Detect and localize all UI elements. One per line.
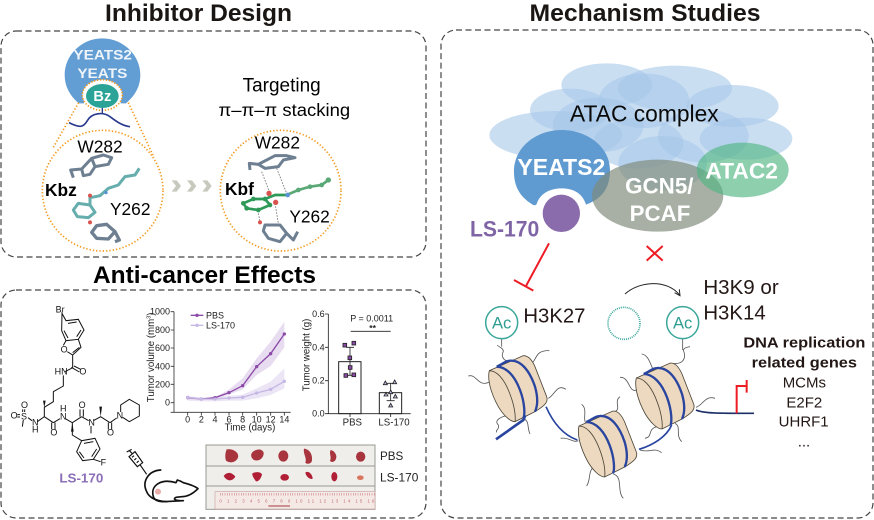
labels: photo rows xyxy=(380,450,419,485)
labels: photo rows: PBS xyxy=(380,450,404,463)
chemical structure: LS-170: O xyxy=(11,411,18,421)
bar chart: tumor weight: 0.0 xyxy=(312,409,325,419)
chemical structure: LS-170: H xyxy=(32,425,38,435)
panel: mechanism studies xyxy=(441,30,873,518)
text: targeting stacking: Targeting xyxy=(243,76,321,97)
mechanism bottom xyxy=(468,277,865,498)
chemical structure: LS-170: HN xyxy=(55,367,68,377)
text: DNA replication genes: MCMs xyxy=(783,374,826,391)
icon: syringe xyxy=(127,449,147,474)
circle: Kbz binding pocket: Y262 xyxy=(110,199,150,219)
chemical structure: LS-170: O xyxy=(61,344,68,354)
protein: YEATS2 xyxy=(514,130,610,205)
line chart: tumor volume: Time (days) xyxy=(225,422,275,433)
line chart: tumor volume: 14 xyxy=(279,414,289,424)
chemical structure: LS-170: O xyxy=(79,400,86,410)
panel: inhibitor design xyxy=(1,31,426,257)
chemical structure: LS-170: S xyxy=(21,411,27,421)
line chart: tumor volume: 800 xyxy=(155,325,170,335)
label: LS-170: LS-170 xyxy=(59,471,103,486)
line chart: tumor volume: 400 xyxy=(155,361,170,371)
promoter xyxy=(737,380,747,413)
mouse, syringe and tumor photo xyxy=(127,445,375,509)
chemical structure: LS-170: F xyxy=(101,457,107,467)
bar chart: tumor weight xyxy=(301,309,411,429)
inhibition arrow xyxy=(514,243,549,291)
nucleosome 3 xyxy=(636,363,694,429)
text: targeting stacking: π–π–π stacking xyxy=(218,100,350,120)
line chart: tumor volume: 8 xyxy=(240,414,245,424)
line chart: tumor volume: LS-170 xyxy=(206,320,235,330)
icon: mouse xyxy=(145,470,198,502)
circle: Kbz binding pocket: W282 xyxy=(77,137,123,157)
line chart: tumor volume: 600 xyxy=(155,343,170,353)
acetyl mark H3K27: Ac xyxy=(492,313,511,332)
empty acetyl site xyxy=(608,307,640,339)
protein: ATAC2 xyxy=(697,143,789,197)
inhibitor: LS-170: LS-170 xyxy=(470,217,539,242)
mechanism top xyxy=(470,63,792,291)
title: Inhibitor Design: Inhibitor Design xyxy=(105,0,292,27)
chemical structure: LS-170: N xyxy=(117,411,123,421)
bar chart: tumor weight: Tumor weight (g) xyxy=(301,319,312,391)
YEATS2 domain with Bz ligand: Bz xyxy=(93,89,111,105)
label: H3K9 or H3K14: H3K14 xyxy=(703,302,766,324)
bar chart: tumor weight: 0.6 xyxy=(312,309,325,319)
inhibitor: LS-170 xyxy=(470,195,580,242)
line chart: tumor volume: Tumor volume (mm xyxy=(146,319,157,402)
line chart: tumor volume: 1000 xyxy=(150,307,170,317)
line chart: tumor volume: 10 xyxy=(252,414,262,424)
nucleosome 1 xyxy=(489,356,547,422)
panel: anti-cancer effects xyxy=(1,290,426,518)
DNA linker strands xyxy=(496,407,754,449)
text: DNA replication genes: related genes xyxy=(752,355,857,371)
line chart: tumor volume: 6 xyxy=(226,414,231,424)
chemical structure: LS-170: Br xyxy=(56,305,65,315)
line chart: tumor volume: 0 xyxy=(185,414,190,424)
anti-cancer contents xyxy=(59,307,419,486)
YEATS2 domain with Bz ligand xyxy=(65,38,140,127)
label: H3K9 or H3K14 xyxy=(703,277,779,324)
bar chart: tumor weight: 0.4 xyxy=(312,342,325,352)
circle: Kbz binding pocket: Kbz xyxy=(45,180,77,200)
line chart: tumor volume: 3 xyxy=(147,316,153,319)
label: H3K27: H3K27 xyxy=(523,306,585,328)
chemical structure: LS-170: N xyxy=(88,417,95,427)
line chart: tumor volume: 12 xyxy=(266,414,276,424)
ATAC complex cloud xyxy=(489,63,792,191)
line chart: tumor volume: 2 xyxy=(199,414,204,424)
bar chart: tumor weight: P = 0.0011 xyxy=(350,314,393,324)
bar chart: tumor weight: LS-170 xyxy=(378,418,410,429)
text: DNA replication genes: DNA replication xyxy=(743,335,865,351)
protein: ATAC2: ATAC2 xyxy=(705,158,778,183)
title: Mechanism Studies: Mechanism Studies xyxy=(530,0,760,27)
line chart: tumor volume xyxy=(146,307,291,433)
circle: Kbz binding pocket xyxy=(42,130,163,251)
chemical structure: LS-170: O xyxy=(79,367,86,377)
arrows: chevrons xyxy=(172,180,212,192)
acetyl mark H3K9/H3K14 xyxy=(667,307,699,350)
bar chart: tumor weight: PBS xyxy=(343,418,362,429)
protein: YEATS2: YEATS2 xyxy=(517,154,605,180)
nucleosome 2 xyxy=(578,411,637,477)
circle: Kbf binding pocket: Y262 xyxy=(289,207,330,227)
protein: GCN5/PCAF: PCAF xyxy=(630,201,690,226)
label: ATAC complex: ATAC complex xyxy=(570,101,719,127)
photo: excised tumors: 0 1 2 3 4 5 6 7 8 9 10 11 12 13 14 15 16 xyxy=(219,499,375,504)
text: DNA replication genes xyxy=(743,335,865,451)
blocked mark xyxy=(647,246,663,261)
YEATS2 domain with Bz ligand: YEATS xyxy=(77,65,127,81)
chemical structure: LS-170: H xyxy=(60,403,66,413)
chemical structure: LS-170: O xyxy=(21,400,28,410)
title: Anti-cancer Effects: Anti-cancer Effects xyxy=(93,262,316,289)
text: DNA replication genes: UHRF1 xyxy=(779,414,829,431)
circle: Kbf binding pocket: Kbf xyxy=(225,179,254,199)
chemical structure: LS-170: O xyxy=(107,427,114,437)
circle: Kbf binding pocket xyxy=(220,130,341,251)
inhibitor design contents xyxy=(42,38,350,251)
labels: photo rows: LS-170 xyxy=(380,472,419,485)
label: H3K9 or H3K14: H3K9 or xyxy=(703,277,779,299)
bar chart: tumor weight: 0.2 xyxy=(312,376,325,386)
protein: GCN5/PCAF xyxy=(592,160,723,232)
histone tails xyxy=(468,345,715,498)
line chart: tumor volume: 0 xyxy=(165,398,170,408)
YEATS2 domain with Bz ligand: YEATS2 xyxy=(73,46,132,62)
photo: excised tumors xyxy=(206,445,375,509)
chemical structure: LS-170: N xyxy=(60,411,66,421)
chemical structure: LS-170 xyxy=(11,305,139,467)
bar chart: tumor weight: ** xyxy=(369,323,377,333)
acetyl mark H3K9/H3K14: Ac xyxy=(673,313,692,332)
acetyl mark H3K27 xyxy=(486,307,518,347)
text: targeting stacking xyxy=(218,76,350,120)
arrow: acetylation xyxy=(625,284,680,296)
line chart: tumor volume: PBS xyxy=(206,310,224,320)
line chart: tumor volume: ) xyxy=(146,312,157,316)
text: DNA replication genes: E2F2 xyxy=(786,394,822,411)
zoom guide lines xyxy=(53,103,154,157)
chemical structure: LS-170: N xyxy=(32,417,38,427)
text: DNA replication genes: ... xyxy=(798,434,810,451)
protein: GCN5/PCAF: GCN5/ xyxy=(625,173,693,198)
chemical structure: LS-170: O xyxy=(50,427,57,437)
line chart: tumor volume: 4 xyxy=(212,414,217,424)
line chart: tumor volume: 200 xyxy=(155,379,170,389)
circle: Kbf binding pocket: W282 xyxy=(255,132,300,152)
